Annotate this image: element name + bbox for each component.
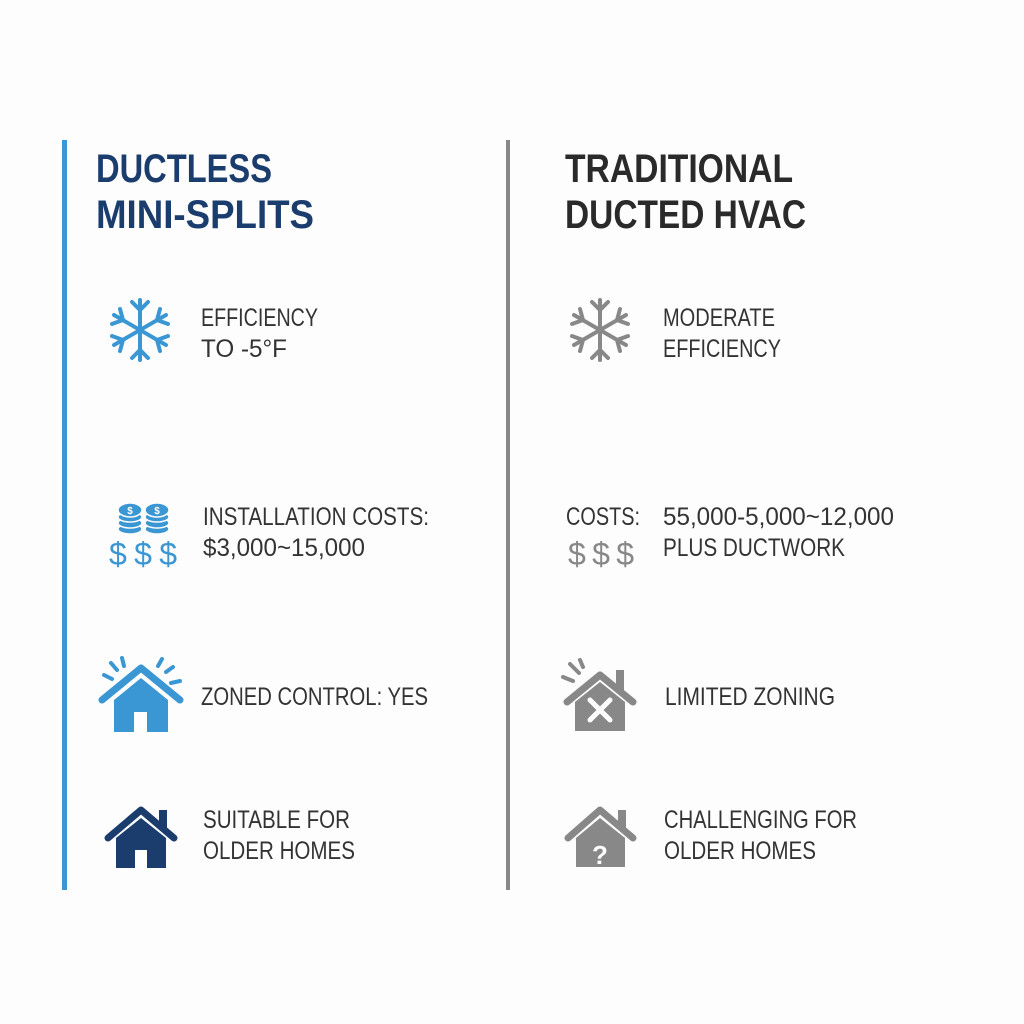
icon: gray house with question mark: ? <box>592 840 608 870</box>
text: suitable for older homes: SUITABLE FOR <box>203 806 350 834</box>
text: installation costs: INSTALLATION COSTS: <box>203 503 429 531</box>
text: costs traditional: PLUS DUCTWORK <box>663 534 845 562</box>
text: moderate efficiency <box>663 304 781 363</box>
icon: coins and dollars blue <box>109 503 177 572</box>
icon: gray house with question mark <box>568 810 633 870</box>
text: installation costs: $3,000~15,000 <box>203 534 365 562</box>
text: moderate efficiency: EFFICIENCY <box>663 335 781 363</box>
right column divider bar <box>506 140 510 890</box>
icon: gray snowflake <box>572 300 628 360</box>
icon: coins and dollars blue: $ <box>154 506 160 517</box>
icon: gray house with x <box>563 660 633 731</box>
left column accent bar <box>62 140 67 890</box>
title: traditional ducted hvac: DUCTED HVAC <box>565 193 806 237</box>
text: efficiency to -5F: TO -5°F <box>201 335 287 363</box>
title: ductless mini-splits: DUCTLESS <box>96 147 272 191</box>
title: ductless mini-splits <box>96 147 314 237</box>
text: suitable for older homes: OLDER HOMES <box>203 837 355 865</box>
text: limited zoning: LIMITED ZONING <box>665 683 835 711</box>
text: costs traditional: COSTS: <box>566 503 640 531</box>
text: challenging for older homes <box>664 806 857 865</box>
text: efficiency to -5F <box>201 304 318 363</box>
icon: blue snowflake <box>112 300 168 360</box>
text: challenging for older homes: OLDER HOMES <box>664 837 816 865</box>
icon: coins and dollars blue: $$$ <box>109 536 177 572</box>
text: zoned control yes: ZONED CONTROL: YES <box>201 683 428 711</box>
title: ductless mini-splits: MINI-SPLITS <box>96 193 314 237</box>
text: challenging for older homes: CHALLENGING FOR <box>664 806 857 834</box>
text: suitable for older homes <box>203 806 355 865</box>
icon: blue house with rays <box>102 658 180 732</box>
text: moderate efficiency: MODERATE <box>663 304 775 332</box>
text: efficiency to -5F: EFFICIENCY <box>201 304 318 332</box>
title: traditional ducted hvac <box>565 147 806 237</box>
text: installation costs <box>203 503 429 562</box>
icon: coins and dollars blue: $ <box>127 506 133 517</box>
icon: navy house <box>108 810 174 868</box>
text: costs traditional: $$$ <box>568 536 634 572</box>
text: costs traditional: 55,000-5,000~12,000 <box>663 503 894 531</box>
text: costs traditional <box>566 503 894 572</box>
title: traditional ducted hvac: TRADITIONAL <box>565 147 793 191</box>
